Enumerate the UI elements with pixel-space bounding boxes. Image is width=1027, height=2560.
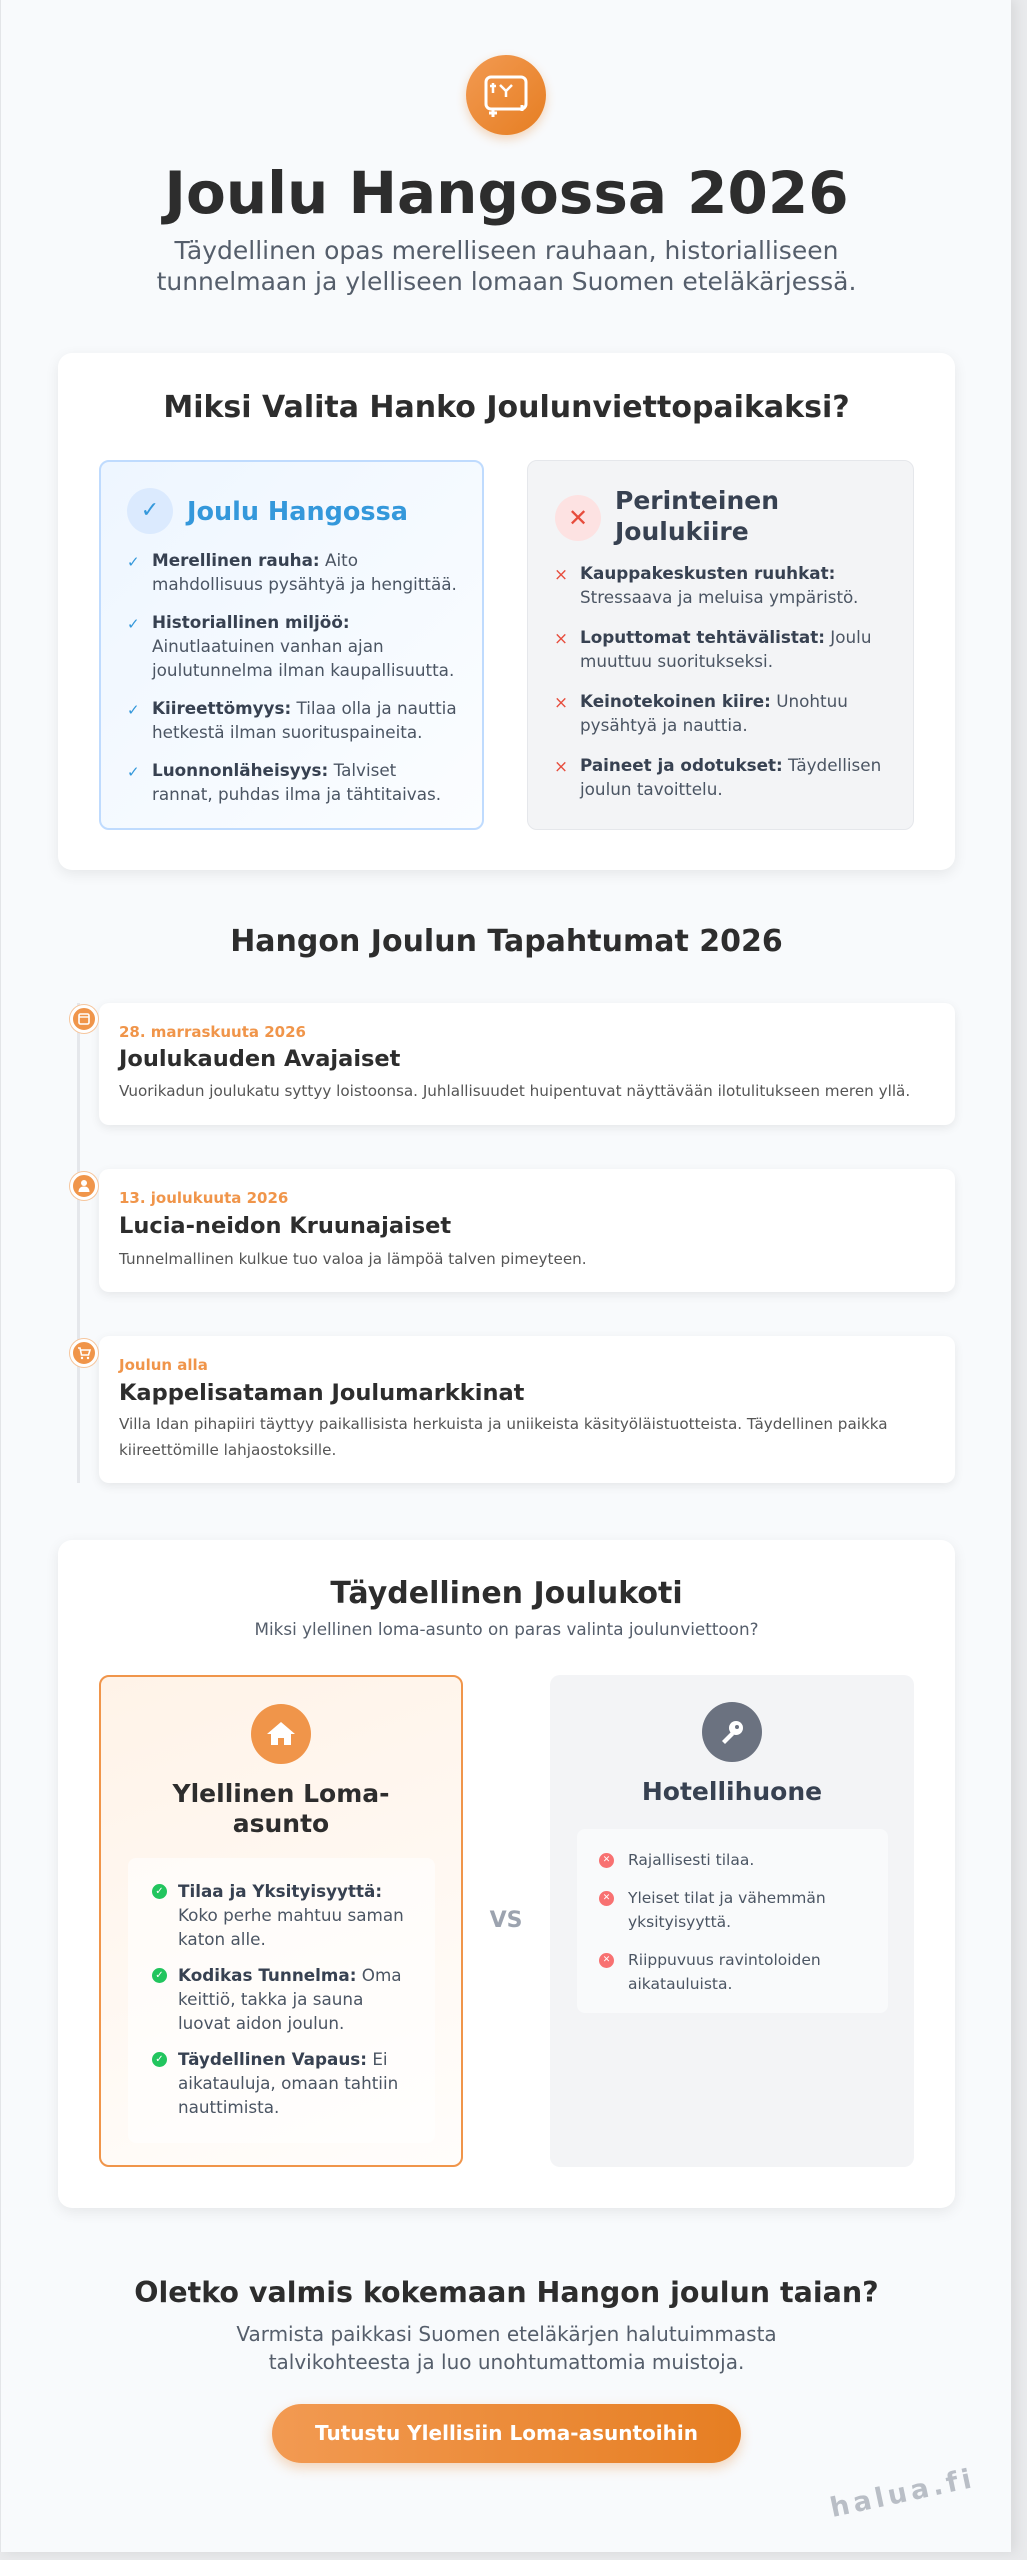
icon: header badge [466,55,546,135]
icon: cross [555,495,601,541]
heading: Perinteinen Joulukiire [614,486,779,546]
event 1 [99,1003,955,1125]
list: drawbacks: × [554,628,568,648]
heading: Ylellinen Loma-asunto [172,1779,390,1838]
event 3 [99,1336,955,1483]
list: drawbacks: × [554,692,568,712]
list: drawbacks: × [554,756,568,776]
list: home benefits: ✓ [155,1886,164,1897]
panel: Perinteinen Joulukiire [527,460,914,830]
list: drawbacks: Paineet ja odotukset: Täydellisen joulun tavoittelu. [580,755,881,799]
list: benefits: ✓ [127,763,140,781]
CTA button [272,2404,741,2463]
watermark: halua.fi [827,2463,978,2524]
panel: perfect home [58,1540,955,2208]
list: home benefits: Tilaa ja Yksityisyyttä: Koko perhe mahtuu saman katon alle. [178,1881,404,1949]
list: hotel drawbacks [577,1829,888,2013]
event 1: 28. marraskuuta 2026 [119,1023,306,1041]
list: benefits: ✓ [127,701,140,719]
icon: person [70,1172,98,1200]
list: hotel drawbacks: Rajallisesti tilaa. [628,1851,754,1869]
list: hotel drawbacks: ✕ [603,1955,610,1965]
list: home benefits: Täydellinen Vapaus: Ei aikatauluja, omaan tahtiin nauttimista. [178,2049,398,2117]
list: hotel drawbacks: ✕ [603,1893,610,1903]
heading: Joulu Hangossa: Joulu Hangossa [187,497,408,527]
timeline [77,1003,80,1483]
list: benefits: Merellinen rauha: Aito mahdollisuus pysähtyä ja hengittää. [152,550,457,594]
event 2: 13. joulukuuta 2026 [119,1189,288,1207]
title: Joulu Hangossa 2026 [164,159,849,227]
panel: why Hanko [58,353,955,870]
event 1: Vuorikadun joulukatu syttyy loistoonsa. Juhlallisuudet huipentuvat näyttävään ilotulitukseen meren yllä. [119,1082,910,1100]
list: benefits: Luonnonläheisyys: Talviset rannat, puhdas ilma ja tähtitaivas. [152,760,441,804]
CTA text [236,2322,777,2374]
list: drawbacks: Loputtomat tehtävälistat: Joulu muuttuu suoritukseksi. [580,627,871,671]
list: home benefits: ✓ [155,2054,164,2065]
heading: Perinteinen Joulukiire: Joulukiire [615,517,749,546]
CTA text: Varmista paikkasi Suomen eteläkärjen halutuimmasta [236,2322,777,2346]
list: drawbacks: Keinotekoinen kiire: Unohtuu pysähtyä ja nauttia. [580,691,848,735]
CTA text: talvikohteesta ja luo unohtumattomia muistoja. [269,2350,744,2374]
event 2: Lucia-neidon Kruunajaiset [119,1213,451,1239]
list: drawbacks [554,563,881,799]
list: home benefits [128,1858,435,2143]
panel: Joulu Hangossa [99,460,484,830]
list: drawbacks: × [554,564,568,584]
icon: house [251,1704,311,1764]
list: hotel drawbacks: Yleiset tilat ja vähemmän yksityisyyttä. [628,1889,826,1931]
icon: key [702,1702,762,1762]
list: drawbacks: Kauppakeskusten ruuhkat: Stressaava ja meluisa ympäristö. [580,563,858,607]
heading: Hotellihuone: Hotellihuone [642,1777,822,1806]
list: benefits: Kiireettömyys: Tilaa olla ja nauttia hetkestä ilman suorituspaineita. [152,698,457,742]
icon: cross: ✕ [568,504,588,532]
icon: check [127,488,173,534]
subtitle: tunnelmaan ja ylelliseen lomaan Suomen eteläkärjessä. [157,267,856,296]
list: benefits: Historiallinen miljöö: Ainutlaatuinen vanhan ajan joulutunnelma ilman kaupallisuutta. [152,612,454,680]
event 3: Villa Idan pihapiiri täyttyy paikallisista herkuista ja uniikeista käsityöläistuotteista. Täydellinen paikka kiireettömille lahjaostoksille. [119,1415,888,1459]
list: hotel drawbacks: Riippuvuus ravintoloiden aikatauluista. [628,1951,821,1993]
list: benefits: ✓ [127,553,140,571]
heading: Täydellinen Joulukoti [330,1576,683,1611]
list: home benefits: ✓ [155,1970,164,1981]
heading: Miksi Valita Hanko Joulunviettopaikaksi? [163,390,850,425]
event 2 [99,1169,955,1292]
event 1: Joulukauden Avajaiset [119,1046,400,1072]
list: benefits [127,550,457,804]
subtitle: Täydellinen opas merelliseen rauhaan, historialliseen [175,236,838,265]
list: benefits: ✓ [127,615,140,633]
heading: Ylellinen Loma-asunto: Ylellinen Loma- [172,1779,390,1808]
icon: check: ✓ [141,498,159,523]
heading: events: Hangon Joulun Tapahtumat 2026 [230,924,783,959]
event 2: Tunnelmallinen kulkue tuo valoa ja lämpöä talven pimeyteen. [119,1250,587,1268]
icon: calendar [70,1005,98,1033]
CTA button: Tutustu Ylellisiin Loma-asuntoihin [315,2421,698,2445]
panel: hotel room [550,1675,914,2167]
subtitle [157,236,856,296]
icon: cart [70,1339,98,1367]
heading: Ylellinen Loma-asunto: asunto [233,1809,329,1838]
event 3: Kappelisataman Joulumarkkinat [119,1380,524,1406]
label: vs: VS [490,1908,522,1933]
panel: holiday home [99,1675,463,2167]
CTA heading: Oletko valmis kokemaan Hangon joulun taian? [134,2276,879,2309]
list: home benefits: Kodikas Tunnelma: Oma keittiö, takka ja sauna luovat aidon joulun. [178,1965,402,2033]
event 3: Joulun alla [119,1356,208,1374]
list: hotel drawbacks: ✕ [603,1855,610,1865]
subheading: Miksi ylellinen loma-asunto on paras valinta joulunviettoon? [254,1619,758,1639]
heading: Perinteinen Joulukiire: Perinteinen [615,486,779,515]
